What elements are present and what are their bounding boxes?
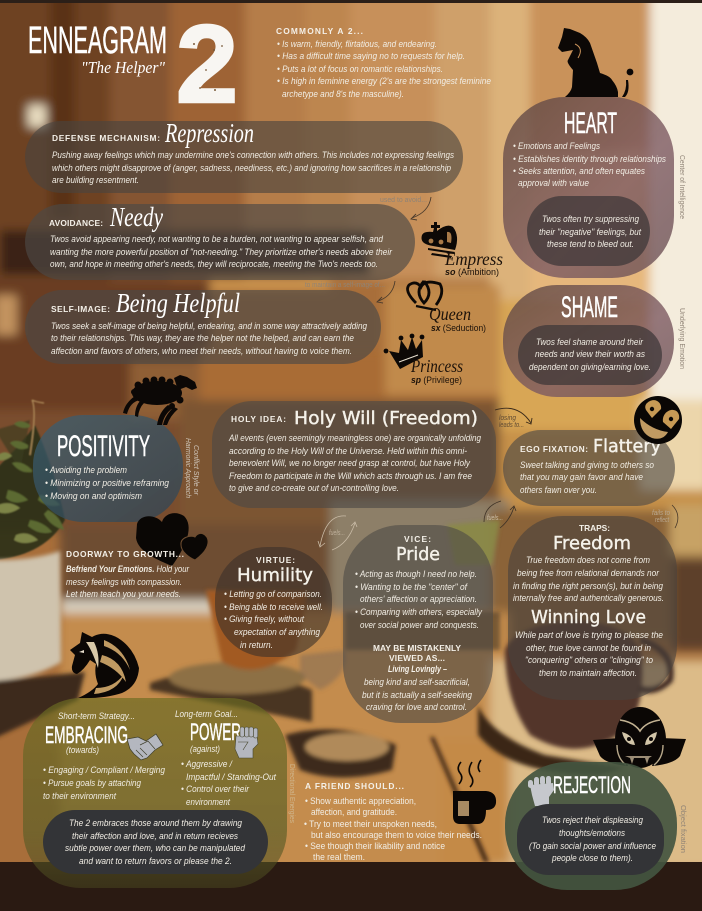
sub-heading: may be mistakenly viewed as: MAY BE MISTAKENLY [373,643,461,653]
side label: underlying emotion: Underlying Emotion [678,308,685,369]
column: power [175,708,276,807]
arrow: losing leads to: losing [499,415,516,422]
label: sx seduction: sx (Seduction) [431,323,486,333]
text block: doorway to growth: messy feelings with compassion. [66,576,182,587]
heading: self-image [51,288,240,318]
arrow: losing leads to: leads to... [499,422,524,429]
text block: commonly a 2: • Puts a lot of focus on romantic relationships. [277,63,443,74]
panel: positivity [33,415,183,522]
trap: freedom: Freedom [553,533,631,554]
body text: are building resentment. [52,174,139,185]
heading: ego fixation: EGO FIXATION: [520,444,588,454]
heading: defense mechanism: DEFENSE MECHANISM: [52,133,160,143]
body text: Freedom to participate in the Will which acts through us. I am free [229,470,472,481]
big number 2: 2 [176,3,238,126]
heading: avoidance: Needy [109,202,163,232]
heading: defense mechanism: Repression [164,118,254,148]
text block: a friend should [304,781,482,862]
icon: hearts [136,513,208,566]
inner callout: (To gain social power and influence [529,840,656,851]
bullet list: • Giving freely, without [224,613,304,624]
bullet list: • Wanting to be the "center" of [355,581,468,592]
panel: holy idea [212,401,496,508]
panel: vice [343,525,493,723]
sub-heading: may be mistakenly viewed as: VIEWED AS... [389,653,445,663]
icon: horse [70,632,139,698]
column: power: • Aggressive / [181,758,233,769]
body text: others fawn over you. [520,484,597,495]
icon: handshake [127,734,163,760]
trap: winning love: other, true love cannot be found in [526,642,651,653]
column: power: • Control over their [181,783,250,794]
panel: avoidance [25,202,415,280]
inner callout: these tend to bleed out. [547,238,634,249]
column: embracing: (towards) [66,744,99,755]
heading: heart: HEART [564,107,617,140]
text block: commonly a 2: • Is warm, friendly, flirtatious, and endearing. [277,38,437,49]
heading: positivity: POSITIVITY [57,430,150,463]
column: power: POWER [190,719,241,746]
bullet list [355,568,483,630]
bullet list: over social power and conquests. [360,619,479,630]
column: power: (against) [190,743,220,754]
bullet list: • Establishes identity through relationships [513,153,666,164]
trap: winning love: "conquering" others or "clinging" to [525,654,653,665]
trap: winning love: Winning Love [531,607,646,628]
inner callout: thoughts/emotions [559,827,625,838]
body text: to their relationships. This way, they are the helper not the helped, and can earn the [51,332,354,343]
label: so ambition: so (Ambition) [445,267,499,277]
body text [228,432,482,493]
bullet list: • Moving on and optimism [45,490,142,501]
bullet list: in return. [240,639,273,650]
heading: defense mechanism [52,118,254,148]
column: power: environment [186,796,230,807]
icon: raised fist [235,727,258,758]
body text: Sweet talking and giving to others so [520,459,654,470]
heading: self-image: SELF-IMAGE: [51,304,110,314]
bullet list: • Letting go of comparison. [224,588,322,599]
column: embracing: EMBRACING [45,722,128,749]
arrow: fails to reflect [652,505,678,528]
text block: a friend should: the real them. [313,851,365,862]
heading: holy idea: Holy Will (Freedom) [294,408,478,429]
panel: traps [508,516,677,700]
body text: Living Lovingly – [388,663,447,674]
bullet list: expectation of anything [234,626,321,637]
body text: according to the Holy Will of the Universe. Held within this omni- [229,445,467,456]
panel: shame [503,285,674,397]
body text: All events (even seemingly meaningless one) are organically unfolding [228,432,482,443]
arrow: used to avoid: used to avoid... [380,197,427,204]
body text: that you may gain favor and have [520,471,643,482]
arrow: fuels to ego fixation: fuels... [487,515,503,522]
trap: winning love [515,607,663,678]
text block: commonly a 2: archetype and 8's the masculine). [282,88,404,99]
inner callout: Twos often try suppressing [542,213,640,224]
column: embracing: Short-term Strategy... [58,710,135,721]
label: empress: Empress [444,249,503,269]
trap: freedom: True freedom does not come from [526,554,650,565]
bullet list: • Acting as though I need no help. [355,568,477,579]
arrow: losing leads to [495,408,532,429]
trap: freedom [513,533,664,603]
body text: being kind and self-sacrificial, [364,676,470,687]
instinct: princess [384,334,463,385]
sub-heading: may be mistakenly viewed as [373,643,461,663]
icon: vampire mask [593,707,686,768]
body text [51,320,368,356]
side label: object fixation: Object fixation [679,805,686,853]
bullet list: • Comparing with others, especially [355,606,483,617]
body text [362,663,473,712]
heading: avoidance [49,202,163,232]
heading: ego fixation: Flattery [593,436,661,457]
arrow: to maintain a self-image: to maintain a self-image of... [305,282,385,289]
panel: heart center [503,97,674,278]
body text [52,149,454,185]
inner callout: needs and view their worth as [535,348,645,359]
text block: a friend should: • Try to meet their unspoken needs, [304,818,437,829]
column: embracing: to their environment [43,790,116,801]
body text: benevolent Will, we no longer need grasp at control, but have Holy [229,457,471,468]
icon: princess crown [384,334,424,369]
column: embracing: • Engaging / Compliant / Merging [43,764,166,775]
heading: vice [396,534,440,565]
arrow: fuels to vice: fuels... [329,530,345,537]
icon: smiling face with heart eyes [634,396,682,444]
body text: affection and favors of others, who meet their needs, without having to voice them. [51,345,352,356]
text block: a friend should: A FRIEND SHOULD... [305,781,404,791]
trap: winning love: them to maintain affection. [539,667,637,678]
icon: tea mug [453,760,496,824]
column: embracing [43,710,166,801]
trap: freedom: being free from relational demands nor [517,567,660,578]
panel: self-image [25,288,381,364]
inner callout: Twos feel shame around their [536,336,644,347]
icon: lion [558,28,633,97]
heading: self-image: Being Helpful [116,288,240,318]
side label: conflict style [184,438,199,498]
inner callout [518,325,662,385]
body text: Twos seek a self-image of being helpful, endearing, and in some way attractively adding [51,320,368,331]
inner callout: their "negative" feelings, but [539,226,641,237]
body text: but it is actually a self-seeking [362,689,473,700]
text block: a friend should: affection, and gratitude. [311,806,397,817]
heading: shame: SHAME [561,291,618,324]
arrow: fuels to vice [318,516,357,550]
bullet list: others' affection or appreciation. [360,593,477,604]
panel: ego fixation [503,430,675,506]
inner callout [517,804,664,875]
body text [520,459,654,495]
heading: holy idea: HOLY IDEA: [231,414,286,424]
inner callout: Twos reject their displeasing [542,814,644,825]
label: princess: Princess [410,356,463,376]
body text: Pushing away feelings which may undermine one's connection with others. This includes not expressing feelings [52,149,454,160]
text block: doorway to growth: Befriend Your Emotions. Hold your [66,563,190,574]
bullet list: • Emotions and Feelings [513,140,600,151]
text block: doorway to growth [66,549,190,599]
column: embracing: • Pursue goals by attaching [43,777,142,788]
label: sp privilege: sp (Privilege) [411,375,462,385]
text block: commonly a 2: • Has a difficult time saying no to requests for help. [277,50,465,61]
heading: vice: VICE: [404,534,431,544]
bullet list: • Being able to receive well. [224,601,323,612]
body text: Twos avoid appearing needy, not wanting to be a burden, not wanting to appear selfish, and [50,233,384,244]
bullet list [224,588,323,650]
text block: a friend should: • Show authentic appreciation, [305,795,416,806]
body text: own, and hope in meeting other's needs, they will reciprocate, meeting the Two's needs too. [50,258,378,269]
bullet list: • Minimizing or positive reframing [45,477,170,488]
heading: virtue: VIRTUE: [256,555,295,565]
panel: virtue [215,547,332,657]
inner callout: their affection and love, and in return recieves [72,830,238,841]
icon: ram [123,375,197,425]
title: Enneagram: ENNEAGRAM [28,20,167,62]
heading: ego fixation [520,436,661,457]
side label: conflict style: Conflict Style or [192,445,199,496]
inner callout: people close to them). [551,852,633,863]
text block: commonly a 2: • Is high in feminine energy (2's are the strongest feminine [277,75,491,86]
inner callout [43,810,268,874]
text block: commonly a 2 [276,26,491,99]
trap: freedom: internally free and authentically generous. [513,592,664,603]
bullet list: approval with value [518,177,589,188]
inner callout: dependent on giving/earning love. [529,361,651,372]
subtitle: The Helper: "The Helper" [81,58,166,77]
heading: rejection: REJECTION [553,772,631,799]
arrow: fuels to ego fixation [484,501,516,528]
plant foliage [0,400,65,560]
text block: a friend should: but also encourage them to voice their needs. [311,829,482,840]
heading: virtue [237,555,313,586]
heading: avoidance: AVOIDANCE: [49,218,103,228]
bullet list [513,140,666,188]
body text: which others might disapprove of (anger, sadness, neediness, etc.) and ignoring how sacrifices in a relationship [52,162,451,173]
bullet list: • Seeks attention, and often equates [513,165,645,176]
arrow: fails to reflect: fails to [652,510,670,517]
body text [50,233,393,269]
bullet list: • Avoiding the problem [45,464,127,475]
icon: queen crown [408,281,442,310]
side label: conflict style: Harmonic Approach [184,438,191,498]
text block: a friend should: • See though their likability and notice [305,840,445,851]
label: queen: Queen [429,304,471,324]
panel: rejection [505,762,677,890]
side label: center of intelligence: Center of Intelligence [678,155,685,219]
trap: freedom: in finding the right person(s), but in being [513,580,664,591]
text block: doorway to growth: DOORWAY TO GROWTH... [66,549,184,559]
trap: winning love: While part of love is trying to please the [515,629,663,640]
title block [28,3,238,126]
arrow: to maintain a self-image [305,281,395,303]
arrow: used to avoid [380,197,431,220]
heading: vice: Pride [396,544,440,565]
text block: commonly a 2: COMMONLY A 2... [276,26,363,36]
column: power: Impactful / Standing-Out [186,771,276,782]
icon: raised fist [528,776,554,806]
side label: directional energies: Directional Energies [288,764,295,823]
heading: traps: TRAPS: [579,523,610,533]
column: power: Long-term Goal... [175,708,238,719]
body text: to give and co-create out of un-controlling love. [229,482,399,493]
body text: craving for love and control. [366,701,467,712]
text block: doorway to growth: Let them teach you your needs. [66,588,181,599]
inner callout: The 2 embraces those around them by drawing [69,817,243,828]
instinct: empress [421,222,503,277]
arrow: fails to reflect: reflect [655,517,670,524]
heading: virtue: Humility [237,565,313,586]
bullet list [45,464,170,501]
panel: defense mechanism [25,118,463,193]
inner callout: subtle power over them, who can be manipulated [65,842,246,853]
body text: wanting the more powerful position of "not-needing." They prioritize other's needs above their [50,246,393,257]
inner callout: and want to return favors or please the 2. [79,855,232,866]
instinct: queen [408,281,486,333]
panel: embracing and power [23,698,287,888]
inner callout [527,196,650,266]
icon: empress crown [421,222,457,258]
